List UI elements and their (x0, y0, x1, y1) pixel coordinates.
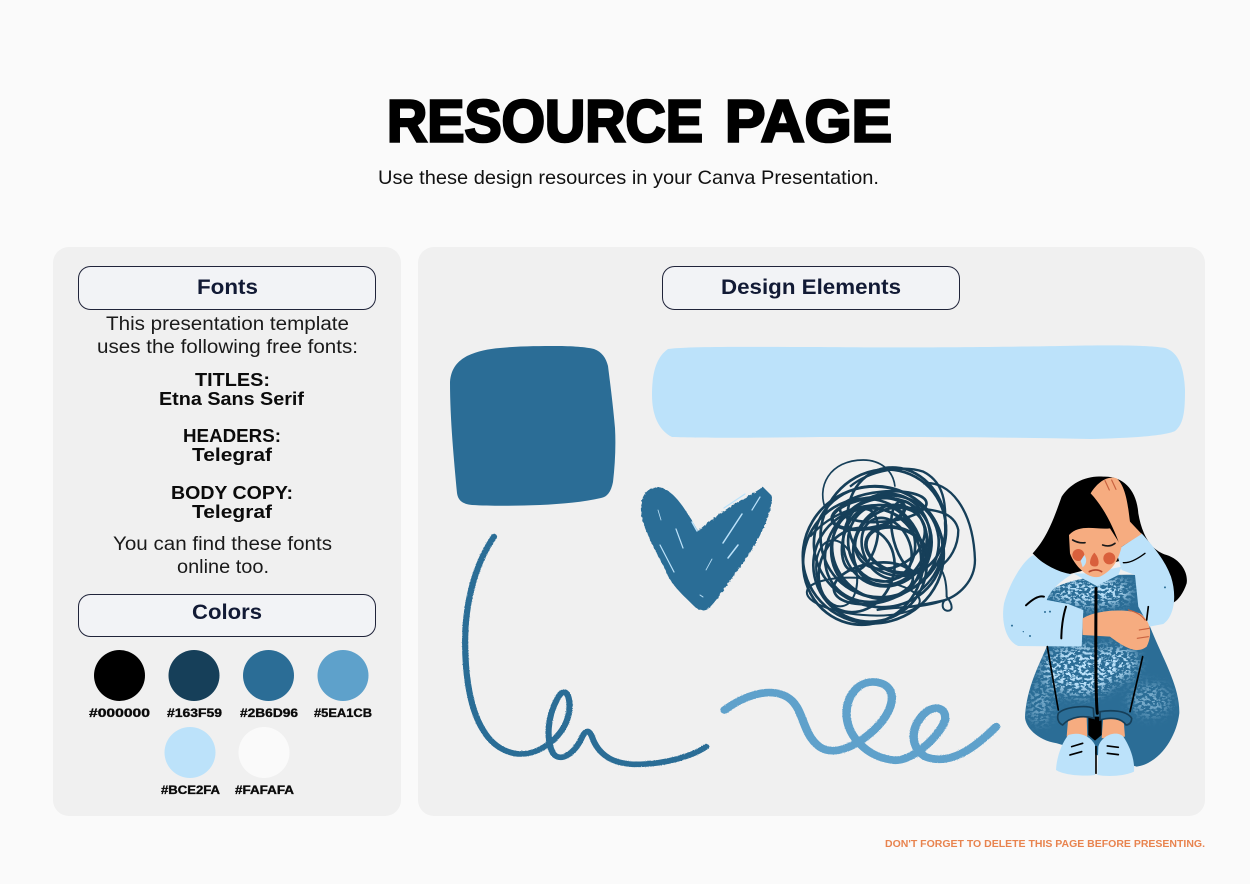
shoes (1056, 734, 1134, 776)
shoe lines (1070, 743, 1118, 773)
swatch: BCE2FA (161, 727, 220, 797)
shape: light blue bar (652, 345, 1185, 439)
swatch: 5EA1CB: #5EA1CB (314, 708, 372, 720)
swatch: 163F59: #163F59 (167, 708, 222, 720)
fonts intro text: uses the following free fonts: (97, 337, 358, 358)
icon: scribble (787, 445, 975, 639)
body copy font (171, 482, 293, 522)
title (387, 88, 892, 154)
swatch: 000000 (89, 650, 150, 720)
titles font: Etna Sans Serif (159, 388, 305, 409)
fonts heading (78, 266, 376, 310)
tear (1081, 555, 1086, 567)
fonts heading: Fonts (197, 275, 258, 299)
titles font: TITLES: (195, 369, 270, 390)
hand on knee (1083, 611, 1150, 650)
ankles (1067, 717, 1125, 738)
shape: rounded square (450, 346, 615, 506)
fonts intro text (97, 314, 358, 358)
right sweater arm (1116, 533, 1174, 627)
swatch: FAFAFA (235, 727, 294, 797)
fonts closing text: You can find these fonts (113, 534, 332, 555)
design elements heading: Design Elements (721, 275, 901, 299)
facial lines (1073, 540, 1115, 572)
panel: fonts and colors (53, 247, 401, 816)
face (1069, 528, 1122, 577)
headers font (183, 425, 281, 465)
clothing lines (1026, 553, 1148, 713)
swatch: FAFAFA: #FAFAFA (235, 785, 294, 797)
brush stroke: light blue curl (724, 682, 996, 760)
titles font (159, 369, 305, 409)
headers font: HEADERS: (183, 425, 281, 446)
illustration: seated woman (1003, 476, 1187, 776)
panel: design elements (418, 247, 1205, 816)
sleeve specks (1011, 586, 1166, 637)
raised forearm and hand (1091, 478, 1142, 547)
fonts closing text: online too. (177, 557, 269, 578)
jeans body (1025, 575, 1179, 767)
jean cuffs (1058, 707, 1132, 725)
icon: brush heart (641, 487, 772, 610)
colors heading: Colors (192, 600, 262, 624)
swatch: 2B6D96 (240, 650, 298, 720)
swatch: 2B6D96: #2B6D96 (240, 708, 298, 720)
collar (1073, 567, 1122, 586)
swatch: 000000: #000000 (89, 708, 150, 720)
brush stroke: dark blue line (465, 537, 706, 764)
design elements heading (662, 266, 960, 310)
headers font: Telegraf (192, 444, 273, 465)
hair (1033, 476, 1187, 603)
swatch: BCE2FA: #BCE2FA (161, 785, 220, 797)
title: PAGE (725, 88, 892, 154)
subtitle: Use these design resources in your Canva Presentation. (378, 167, 879, 189)
cheeks and nose (1072, 549, 1115, 567)
finger lines (1105, 480, 1149, 638)
fonts closing text (113, 534, 332, 578)
colors heading (78, 594, 376, 636)
body copy font: Telegraf (192, 501, 273, 522)
swatch: 5EA1CB (314, 650, 372, 720)
swatch: 163F59 (167, 650, 222, 720)
footer note: DON'T FORGET TO DELETE THIS PAGE BEFORE PRESENTING. (885, 839, 1205, 850)
body copy font: BODY COPY: (171, 482, 293, 503)
title: RESOURCE (387, 88, 703, 154)
jeans paint texture (1025, 575, 1176, 728)
fonts intro text: This presentation template (106, 314, 349, 335)
left sweater arm (1003, 555, 1083, 647)
